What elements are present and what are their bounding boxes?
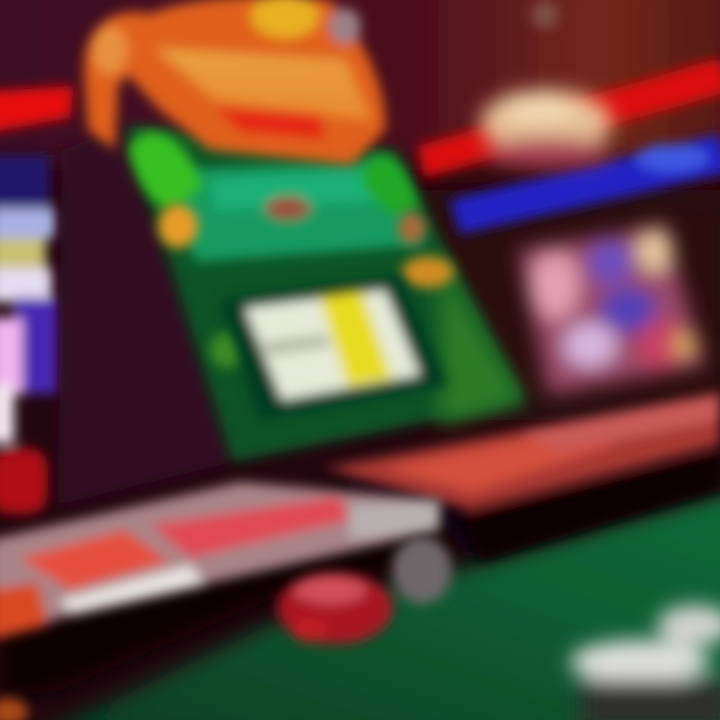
top banner: teal green panel (165, 160, 425, 262)
left betting table: red and white keys (0, 482, 440, 640)
bright green side lights (128, 132, 420, 215)
screen white (245, 290, 420, 400)
slot machine cabinet: dark purple side (58, 125, 232, 505)
reel line shadows (262, 334, 332, 356)
right betting table: pink and red keys (325, 392, 720, 562)
yellow reel column (320, 292, 392, 386)
left machine: purple and white panels (0, 155, 60, 514)
sign: cream dome, right (480, 90, 612, 166)
neon stripe: red, left (0, 86, 74, 134)
green felt table (30, 490, 720, 720)
right machine: coloured reels (518, 225, 705, 395)
neon stripe: blue, right (450, 134, 720, 234)
corner: orange glow bottom left (0, 698, 28, 720)
machine front panel (125, 125, 525, 462)
poker chips: red stack (277, 536, 452, 644)
screen dark surround (220, 275, 448, 420)
machine crown: orange topper (84, 0, 559, 165)
lower panel olive glow (440, 260, 525, 425)
lower dark shadow under tables (0, 420, 720, 700)
neon stripe: red, right (418, 58, 720, 178)
reel screen (220, 275, 448, 420)
slot machine body: green (125, 125, 525, 462)
white chips: bottom right (570, 605, 720, 720)
orange ornaments on sides (158, 204, 454, 368)
